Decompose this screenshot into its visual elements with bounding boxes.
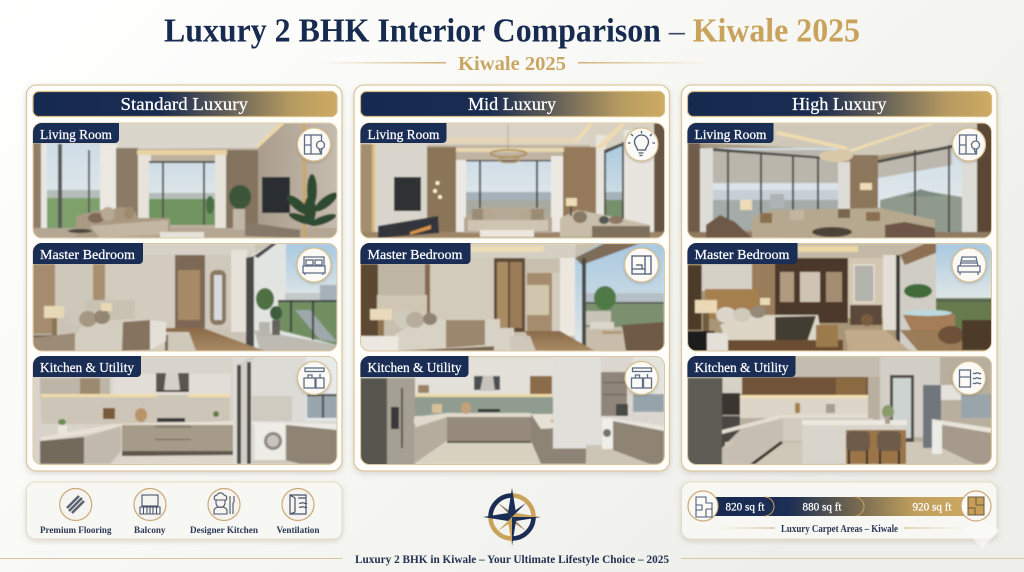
panel: High Luxury: [682, 85, 997, 471]
footer: Luxury 2 BHK in Kiwale – Your Ultimate Lifestyle Choice – 2025: [355, 552, 669, 566]
feature: Premium Flooring: Premium Flooring: [40, 525, 112, 536]
heading: Standard Luxury: Standard Luxury: [120, 94, 248, 114]
image: standard kitchen and utility: [33, 356, 337, 464]
label: Living Room: Living Room: [40, 128, 112, 143]
icon: floor plan large: [961, 491, 991, 521]
label: Kitchen & Utility: [360, 356, 468, 377]
icon: floor plan small: [688, 491, 718, 521]
bar: carpet area scale: 880 sq ft: [802, 502, 842, 514]
icon: window and bulb: [298, 128, 330, 161]
feature: Ventilation: Ventilation: [276, 525, 320, 536]
label: Living Room: Living Room: [368, 128, 440, 143]
heading: High Luxury: [688, 92, 992, 116]
icon: window and bulb: [952, 128, 986, 161]
icon: kitchen: [298, 362, 330, 394]
heading: Standard Luxury: [33, 92, 337, 116]
panel: features: [26, 482, 342, 539]
label: Master Bedroom: [688, 243, 798, 264]
icon: luxury bed: [952, 248, 986, 282]
icon: kitchen: [625, 362, 658, 394]
title: Luxury 2 BHK Interior Comparison – Kiwale 2025: [164, 12, 860, 50]
panel: Mid Luxury: [354, 85, 670, 471]
label: Kitchen & Utility: [33, 356, 141, 377]
bar: carpet area scale: 920 sq ft: [912, 502, 952, 514]
feature: Balcony: Balcony: [134, 525, 166, 536]
image: standard master bedroom: [33, 244, 337, 352]
sparkle: [964, 520, 1000, 548]
feature: Designer Kitchen: Designer Kitchen: [190, 525, 259, 536]
subtitle: Kiwale 2025: [458, 53, 566, 75]
image: mid master bedroom: [360, 244, 664, 352]
panel: carpet areas: [682, 482, 1000, 548]
feature: Premium Flooring: [40, 488, 112, 536]
label: Master Bedroom: [360, 243, 470, 264]
label: Living Room: Living Room: [694, 128, 767, 143]
heading: Mid Luxury: Mid Luxury: [468, 94, 556, 114]
feature: Ventilation: [276, 488, 320, 536]
label: Living Room: [688, 123, 774, 143]
image: standard living room: [33, 123, 340, 238]
image: high master bedroom: [688, 244, 992, 352]
label: Kitchen & Utility: Kitchen & Utility: [40, 361, 134, 376]
label: Kitchen & Utility: Kitchen & Utility: [368, 361, 462, 376]
label: Master Bedroom: Master Bedroom: [368, 248, 463, 263]
label: Master Bedroom: Master Bedroom: [694, 248, 790, 263]
panel: Standard Luxury: [26, 85, 342, 471]
icon: compass: [483, 488, 541, 546]
label: Kitchen & Utility: Kitchen & Utility: [694, 361, 788, 376]
icon: bulb: [625, 128, 658, 161]
label: Living Room: [33, 123, 119, 143]
label: Master Bedroom: Master Bedroom: [40, 248, 135, 263]
bar: carpet area scale: [712, 497, 966, 516]
bar: carpet area scale: 820 sq ft: [726, 502, 765, 514]
heading: High Luxury: High Luxury: [792, 94, 886, 114]
label: Master Bedroom: [33, 243, 143, 264]
icon: fridge and air: [952, 362, 986, 394]
icon: wardrobe and bed: [624, 248, 658, 282]
image: high living room: [688, 123, 992, 238]
feature: Balcony: [134, 488, 166, 536]
label: Kitchen & Utility: [688, 356, 796, 377]
feature: Designer Kitchen: [190, 488, 259, 536]
icon: bed: [297, 248, 331, 282]
image: mid living room: [360, 123, 665, 238]
image: high kitchen and utility: [688, 356, 992, 465]
caption: Luxury Carpet Areas: Luxury Carpet Areas – Kiwale: [781, 524, 898, 535]
label: Living Room: [360, 123, 446, 143]
heading: Mid Luxury: [360, 92, 664, 116]
image: mid kitchen and utility: [360, 356, 665, 465]
